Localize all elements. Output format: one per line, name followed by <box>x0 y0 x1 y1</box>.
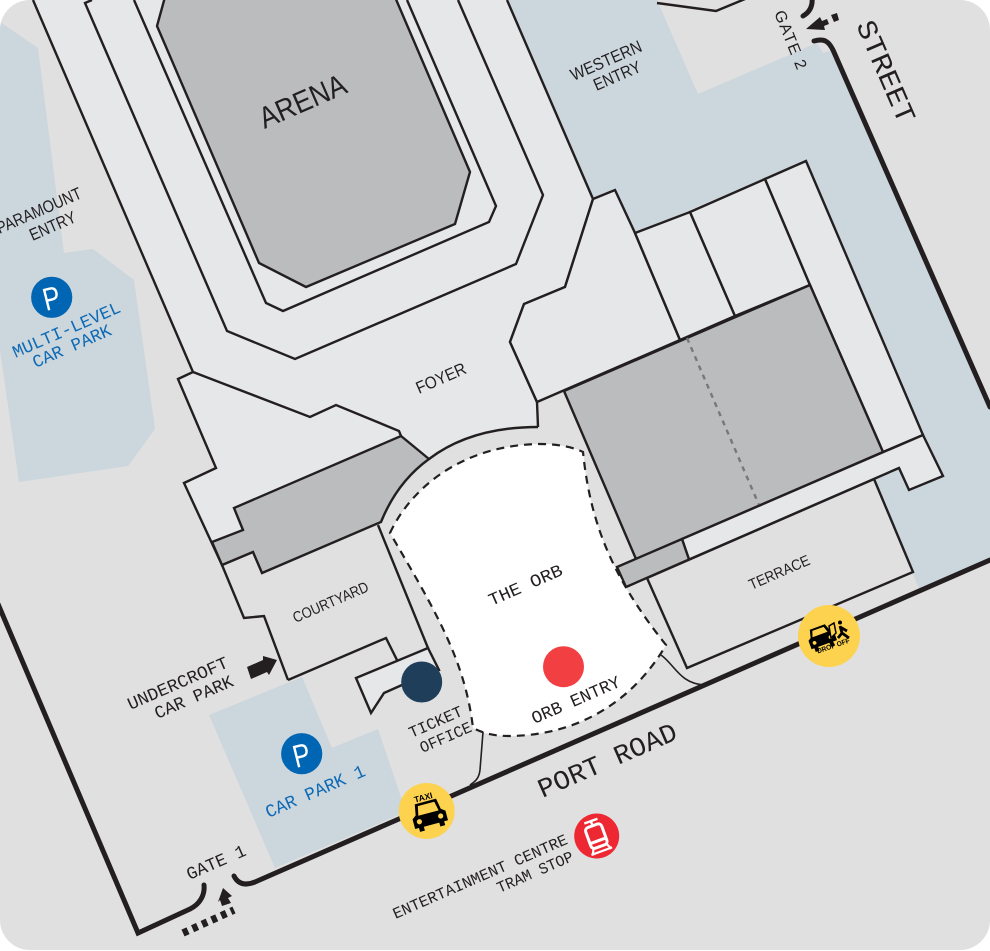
area: western entry <box>507 0 990 589</box>
ticket office building <box>356 648 439 713</box>
label: arena: ARENA <box>254 68 352 135</box>
map labels <box>0 37 813 924</box>
label: ticket office <box>406 703 475 758</box>
icon: parking car park 1 <box>281 733 322 775</box>
grey band between wing and courtyard <box>212 436 429 573</box>
label: entertainment centre tram stop: ENTERTAINMENT CENTRE <box>390 831 571 924</box>
label: western entry: WESTERN <box>567 37 645 85</box>
label: car park 1: CAR PARK 1 <box>263 762 369 823</box>
arena floor <box>157 0 470 287</box>
top building corner <box>657 0 745 11</box>
icon: drop off <box>798 605 860 667</box>
label: gate 2: GATE 2 <box>770 8 809 72</box>
label: port road: PORT ROAD <box>534 719 683 806</box>
icon: taxi: TAXI <box>413 790 434 805</box>
label: courtyard: COURTYARD <box>290 579 371 627</box>
label: orb entry: ORB ENTRY <box>529 673 624 729</box>
label: foyer: FOYER <box>413 359 469 398</box>
label: undercroft car park: CAR PARK <box>152 672 237 724</box>
arrow: undercroft car park <box>247 656 277 679</box>
icon: parking multi-level: P <box>39 279 64 318</box>
icon: parking multi-level <box>31 277 72 318</box>
small grey slab <box>617 539 689 587</box>
building: foyer and arena concourse <box>33 0 593 680</box>
label: entertainment centre tram stop: TRAM STOP <box>494 848 577 898</box>
label: paramount entry: ENTRY <box>26 208 79 245</box>
terrace <box>647 479 913 668</box>
area: car park 1 <box>209 677 406 868</box>
label: gate 1: GATE 1 <box>184 842 250 885</box>
the orb dashed space <box>390 444 666 736</box>
label: the orb: THE ORB <box>486 562 566 611</box>
back of house rooms <box>635 161 923 452</box>
label: ticket office: TICKET <box>406 703 466 743</box>
label: multi-level car park: CAR PARK <box>30 321 115 373</box>
label: terrace: TERRACE <box>746 552 813 594</box>
orb forecourt arc <box>429 427 538 459</box>
icon: taxi <box>399 783 455 839</box>
icon: ticket office marker <box>401 662 442 702</box>
right wing <box>510 190 680 402</box>
label: street: STREET <box>848 16 919 129</box>
label: ticket office: OFFICE <box>417 719 475 758</box>
icon: orb entry marker <box>543 646 584 687</box>
building: arena inner ring <box>134 0 496 311</box>
label: multi-level car park: MULTI-LEVEL <box>10 299 124 363</box>
icon: drop off: DROP OFF <box>816 637 851 655</box>
icon: parking car park 1: P <box>289 736 314 775</box>
walkway strip <box>682 435 943 560</box>
area: multi-level car park <box>0 22 155 482</box>
hall <box>564 285 883 559</box>
icon: tram stop <box>574 814 619 858</box>
arrow: gate 2 entry <box>806 13 839 30</box>
label: paramount entry <box>0 184 84 245</box>
label: undercroft car park: UNDERCROFT <box>125 654 232 715</box>
arrow: gate 1 entry <box>183 888 234 933</box>
connector paths to road <box>470 655 705 785</box>
courtyard outline <box>288 525 428 680</box>
label: western entry: ENTRY <box>590 57 644 95</box>
